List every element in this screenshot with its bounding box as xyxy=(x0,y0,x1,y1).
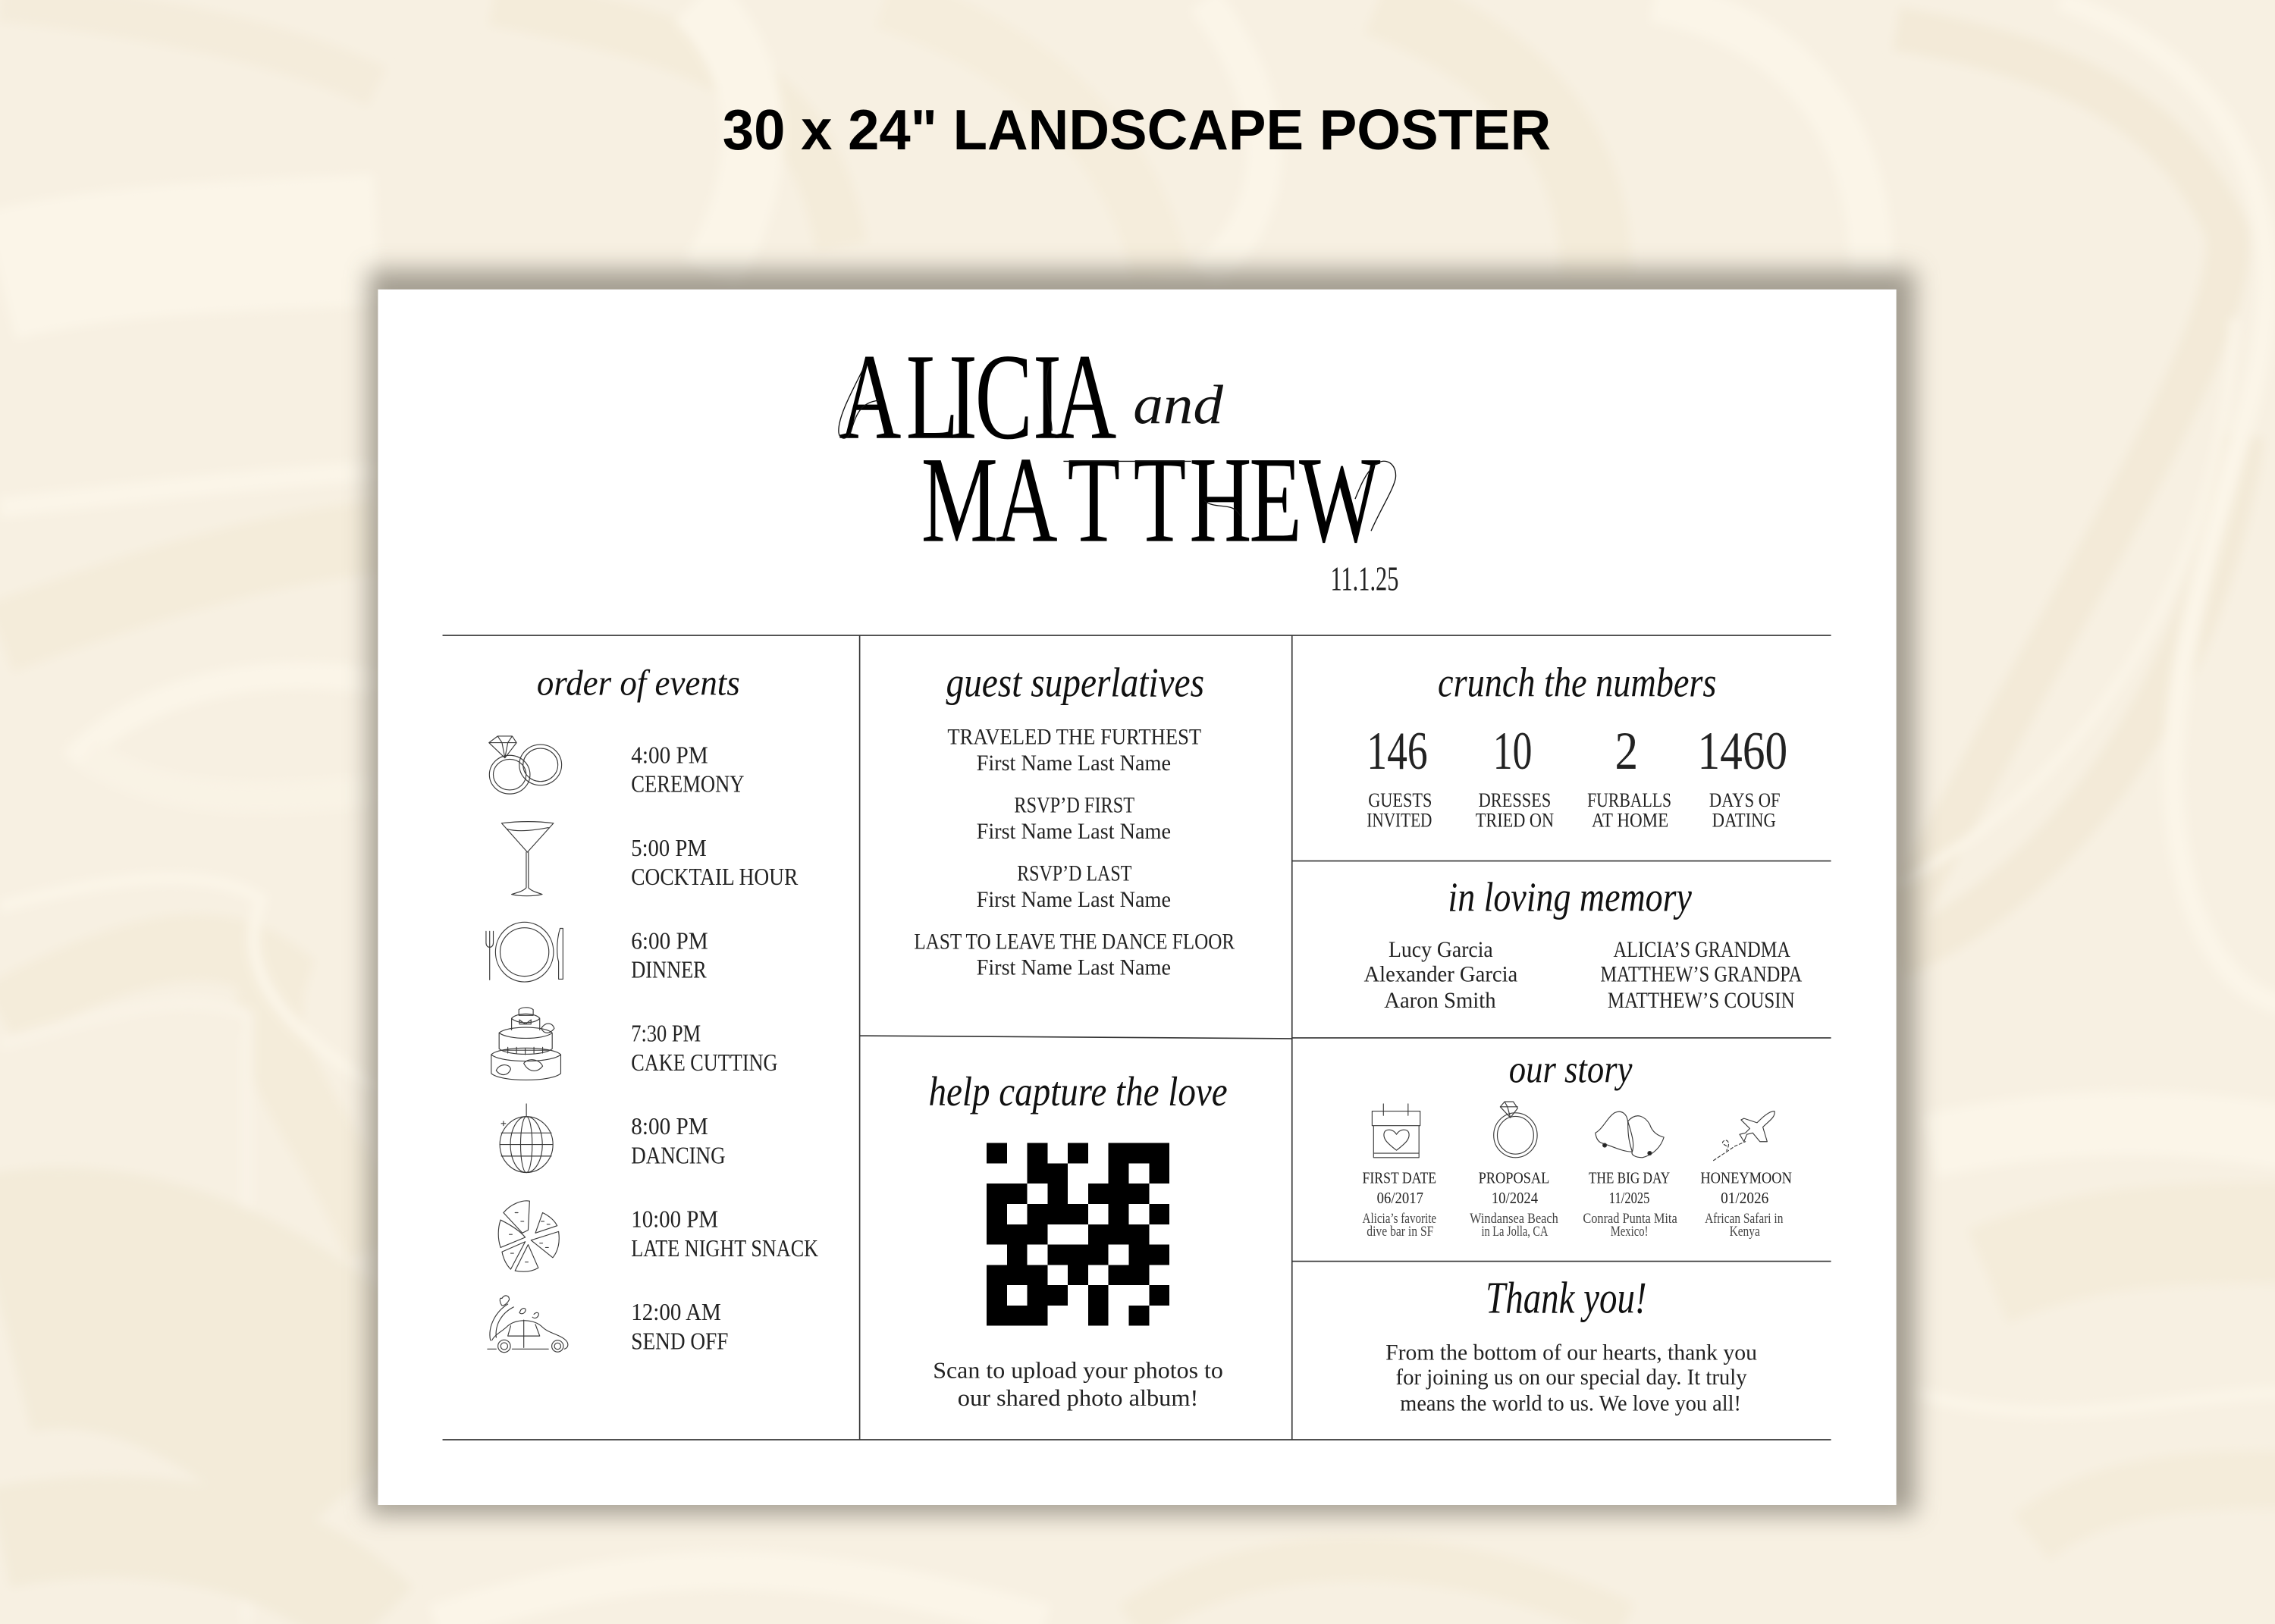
panel: in loving memory xyxy=(1363,875,1803,1013)
heading: order of events: order of events xyxy=(537,663,740,703)
superlative 4 xyxy=(914,930,1235,980)
wedding date: 11.1.25 xyxy=(1330,560,1398,598)
panel: guest superlatives xyxy=(914,660,1235,980)
milestone: honeymoon: HONEYMOON xyxy=(1700,1168,1792,1187)
milestone: honeymoon: Kenya xyxy=(1730,1224,1760,1240)
text: 4:00 PM: 4:00 PM xyxy=(631,741,708,768)
names column: Alexander Garcia xyxy=(1363,962,1517,986)
text: dinner: DINNER xyxy=(631,957,707,983)
milestone: first date: Alicia’s favorite xyxy=(1363,1211,1436,1227)
panel: crunch the numbers xyxy=(1367,660,1787,832)
milestone: first date: FIRST DATE xyxy=(1363,1168,1436,1187)
superlative 3: RSVP’D LAST xyxy=(1017,861,1131,886)
caption: scan instructions: Scan to upload your photos to xyxy=(933,1358,1223,1384)
stat: furballs at home: AT HOME xyxy=(1592,809,1668,832)
milestone: honeymoon: African Safari in xyxy=(1705,1211,1784,1227)
milestone: first date: 06/2017 xyxy=(1377,1189,1423,1207)
row: cocktail hour xyxy=(501,822,798,896)
stat: furballs at home: 2 xyxy=(1614,722,1638,781)
milestone: proposal: 10/2024 xyxy=(1492,1189,1538,1207)
icon: airplane xyxy=(1714,1111,1774,1161)
relations column: MATTHEW’S GRANDPA xyxy=(1600,962,1803,986)
text: 8:00 PM: 8:00 PM xyxy=(631,1113,708,1140)
row: dinner xyxy=(486,922,708,983)
text: send off: SEND OFF xyxy=(631,1328,728,1354)
superlative 3: First Name Last Name xyxy=(977,888,1171,912)
stat: furballs at home xyxy=(1587,722,1671,832)
stat: days of dating: DAYS OF xyxy=(1709,788,1781,811)
thank-you message: for joining us on our special day. It truly xyxy=(1396,1365,1747,1390)
text: 6:00 PM: 6:00 PM xyxy=(631,927,708,954)
text: dancing: DANCING xyxy=(631,1142,726,1168)
text: ceremony: CEREMONY xyxy=(631,771,745,798)
stat: furballs at home: FURBALLS xyxy=(1587,788,1671,811)
icon: engagement ring xyxy=(1494,1102,1537,1158)
names column xyxy=(1363,938,1517,1013)
panel: help capture the love xyxy=(928,1069,1228,1411)
icon: plate and cutlery xyxy=(486,922,563,982)
names column: Aaron Smith xyxy=(1384,989,1496,1013)
milestone: first date: dive bar in SF xyxy=(1367,1224,1433,1240)
superlative 4: First Name Last Name xyxy=(977,956,1171,980)
heading: crunch the numbers: crunch the numbers xyxy=(1438,660,1716,706)
icon: wedding bells xyxy=(1596,1111,1664,1158)
icon: rings xyxy=(489,736,562,794)
superlative 2: RSVP’D FIRST xyxy=(1014,793,1134,817)
heading: thank you: Thank you! xyxy=(1486,1273,1647,1323)
QR code xyxy=(987,1143,1169,1326)
text: late night snack: LATE NIGHT SNACK xyxy=(631,1235,818,1262)
icon: disco ball xyxy=(500,1104,553,1172)
text: cake cutting: CAKE CUTTING xyxy=(631,1049,778,1076)
stat: guests invited: INVITED xyxy=(1367,809,1432,832)
name: Alicia: ALICIA xyxy=(839,329,1116,466)
relations column: MATTHEW’S COUSIN xyxy=(1608,989,1795,1013)
superlative 1: TRAVELED THE FURTHEST xyxy=(947,726,1201,750)
row: dancing xyxy=(500,1104,726,1172)
milestone: the big day: 11/2025 xyxy=(1609,1189,1649,1207)
couple names title xyxy=(839,329,1398,598)
row: cake cutting xyxy=(491,1008,778,1080)
stat: dresses tried on: DRESSES xyxy=(1479,788,1551,811)
stat: dresses tried on: 10 xyxy=(1493,722,1532,781)
heading: in loving memory: in loving memory xyxy=(1448,875,1692,921)
milestone: proposal: Windansea Beach xyxy=(1470,1211,1558,1227)
names column: Lucy Garcia xyxy=(1389,938,1493,962)
superlative 2: First Name Last Name xyxy=(977,820,1171,844)
thank-you message: From the bottom of our hearts, thank you xyxy=(1385,1341,1757,1365)
milestone: proposal: in La Jolla, CA xyxy=(1481,1224,1549,1240)
text: 12:00 AM: 12:00 AM xyxy=(631,1299,721,1325)
stat: dresses tried on: TRIED ON xyxy=(1476,809,1554,832)
heading: help capture the love: help capture the love xyxy=(928,1069,1228,1115)
milestone: the big day: THE BIG DAY xyxy=(1589,1168,1670,1187)
decorative swashes xyxy=(839,362,1396,531)
panel: our story xyxy=(1363,1048,1792,1240)
milestone: the big day: Conrad Punta Mita xyxy=(1583,1211,1677,1227)
row: late night snack xyxy=(498,1201,818,1271)
heading: our story: our story xyxy=(1509,1048,1632,1091)
stat: days of dating: DATING xyxy=(1712,809,1776,832)
thank-you message: means the world to us. We love you all! xyxy=(1400,1392,1741,1416)
icon: wedding cake xyxy=(491,1008,560,1080)
thank-you message xyxy=(1385,1341,1757,1416)
icon: martini xyxy=(501,822,554,896)
caption: scan instructions xyxy=(933,1358,1223,1411)
milestone: first date xyxy=(1363,1104,1436,1240)
row: ceremony xyxy=(489,736,745,798)
poster shadow xyxy=(369,270,1916,1514)
superlative 2 xyxy=(977,793,1171,844)
page heading: 30 x 24" LANDSCAPE POSTER xyxy=(723,99,1551,162)
milestone: the big day xyxy=(1583,1111,1677,1240)
milestone: proposal: PROPOSAL xyxy=(1479,1168,1549,1187)
stat: dresses tried on xyxy=(1476,722,1554,832)
row: send off xyxy=(488,1296,728,1354)
text: 10:00 PM: 10:00 PM xyxy=(631,1206,718,1233)
stat: guests invited: 146 xyxy=(1367,722,1428,781)
relations column: ALICIA’S GRANDMA xyxy=(1614,938,1790,962)
poster xyxy=(378,290,1897,1505)
relations column xyxy=(1600,938,1803,1013)
name: and: and xyxy=(1133,375,1224,436)
icon: pizza xyxy=(498,1201,559,1271)
superlative 1: First Name Last Name xyxy=(977,751,1171,776)
milestone: the big day: Mexico! xyxy=(1611,1224,1648,1240)
grid lines xyxy=(443,635,1831,1440)
stat: guests invited: GUESTS xyxy=(1368,788,1432,811)
icon: calendar xyxy=(1372,1104,1420,1158)
text: 7:30 PM: 7:30 PM xyxy=(631,1020,701,1047)
panel: order of events xyxy=(486,663,818,1354)
text: 5:00 PM: 5:00 PM xyxy=(631,835,707,861)
milestone: proposal xyxy=(1470,1102,1558,1240)
icon: getaway car xyxy=(488,1296,568,1353)
text: cocktail hour: COCKTAIL HOUR xyxy=(631,864,798,890)
superlative 3 xyxy=(977,861,1171,912)
caption: scan instructions: our shared photo album! xyxy=(958,1385,1198,1411)
stat: guests invited xyxy=(1367,722,1432,832)
milestone: honeymoon: 01/2026 xyxy=(1721,1189,1768,1207)
panel: thank you xyxy=(1385,1273,1757,1416)
stat: days of dating xyxy=(1698,722,1787,832)
stat: days of dating: 1460 xyxy=(1698,722,1787,781)
name: Matthew: MATTHEW xyxy=(921,432,1381,569)
milestone: honeymoon xyxy=(1700,1111,1792,1240)
superlative 1 xyxy=(947,726,1201,776)
superlative 4: LAST TO LEAVE THE DANCE FLOOR xyxy=(914,930,1235,954)
heading: guest superlatives: guest superlatives xyxy=(946,660,1204,706)
